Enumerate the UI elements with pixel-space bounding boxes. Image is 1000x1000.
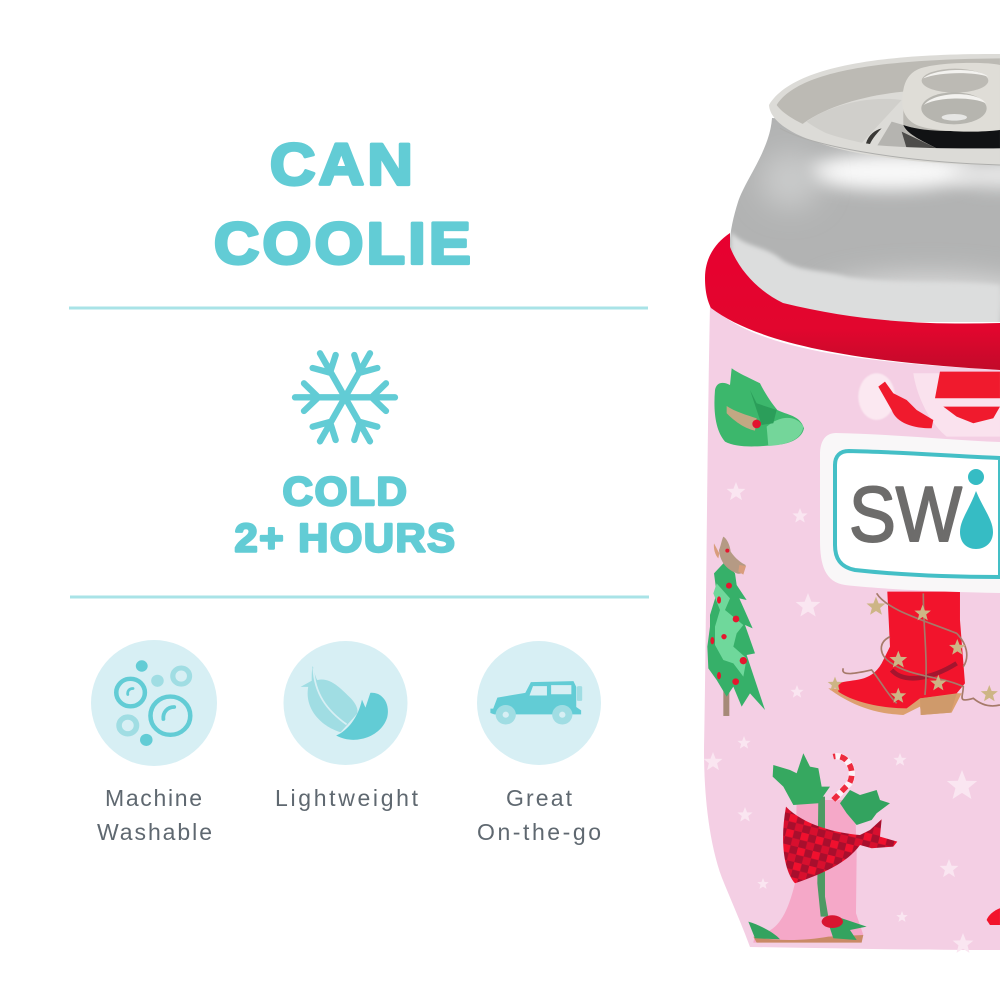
logo droplet (960, 469, 993, 549)
feature: great on-the-go (477, 641, 601, 845)
cold duration text: COLD (282, 470, 408, 514)
pattern: green cowboy hat (714, 368, 804, 446)
pattern: red boot with lights (828, 592, 1000, 715)
pattern: christmas tree (707, 537, 765, 716)
panel: product features (69, 132, 649, 845)
pattern: santa hat (858, 372, 1000, 437)
feature: machine washable (91, 640, 217, 845)
icon: feather (301, 666, 388, 740)
cold duration text (234, 470, 456, 560)
feature: lightweight (275, 641, 419, 811)
label: Machine (105, 785, 202, 811)
label: Washable (97, 819, 212, 845)
title: COOLIE (214, 212, 474, 276)
logo patch (820, 433, 1000, 593)
title: CAN (270, 132, 416, 198)
red collar (705, 233, 1000, 370)
label: On-the-go (477, 819, 601, 845)
logo wordmark: SW (849, 470, 962, 558)
title (214, 132, 474, 276)
label: Lightweight (275, 785, 419, 811)
label (477, 785, 601, 845)
icon: snowflake (295, 353, 395, 441)
pattern: pink boot with bandana and candy cane (748, 753, 1000, 943)
cold duration text: 2+ HOURS (234, 516, 456, 560)
icon: pull tab (902, 63, 1000, 132)
icon: jeep (490, 681, 582, 724)
can shoulder (730, 118, 1000, 322)
label (97, 785, 212, 845)
coolie sleeve (704, 305, 1000, 950)
icon: bubbles (116, 660, 190, 746)
can rim and lid (769, 54, 1000, 165)
label: Great (506, 785, 573, 811)
pattern: white stars (704, 482, 977, 953)
product photo: can in coolie (704, 54, 1000, 953)
sleeve pattern (704, 368, 1000, 953)
